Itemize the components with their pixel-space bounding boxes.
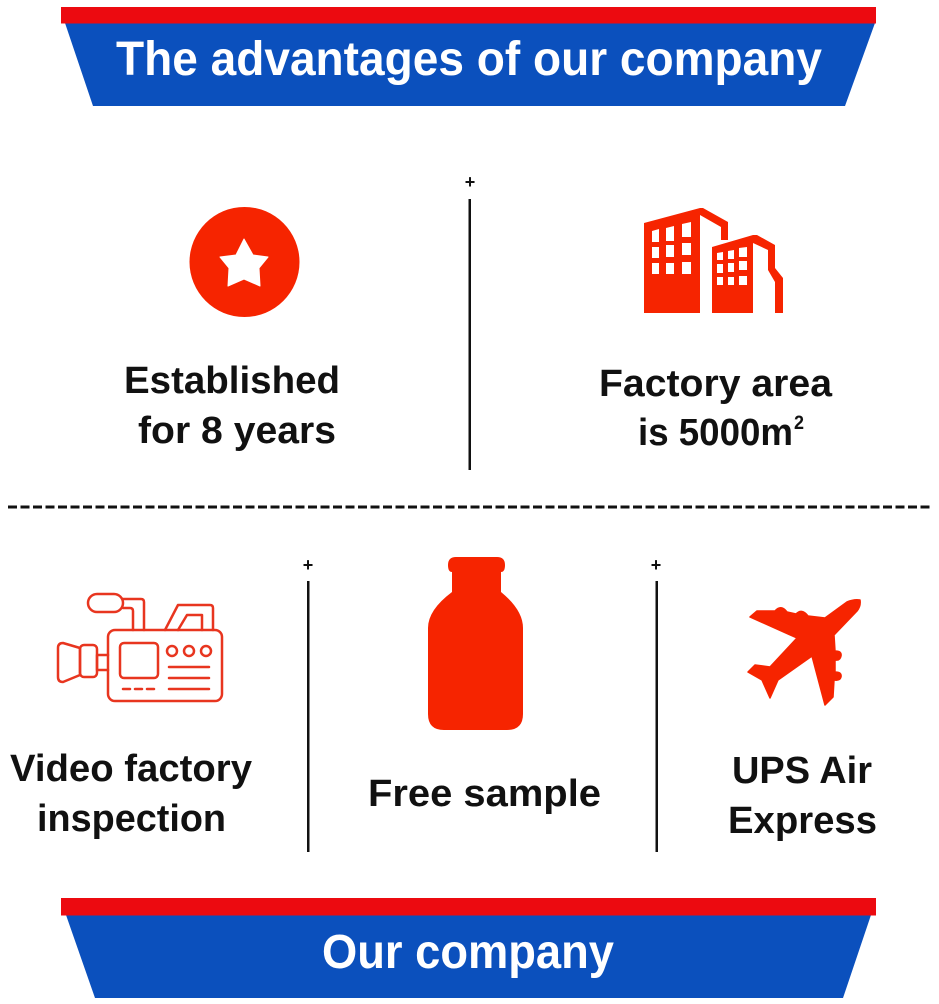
- label: factory area: 2: [794, 413, 804, 434]
- label: factory area: [599, 363, 833, 454]
- icon: video camera: [58, 594, 222, 701]
- bottom banner: [61, 898, 876, 998]
- dashed separator: [8, 506, 930, 508]
- panel: free sample: [368, 557, 601, 815]
- banner title: The advantages of our company: [116, 33, 822, 86]
- divider: left vertical with plus: +: [303, 555, 313, 575]
- label: ups air express: Express: [728, 800, 877, 842]
- label: ups air express: UPS Air: [732, 750, 872, 792]
- label: factory area: Factory area: [599, 363, 833, 405]
- label: established: for 8 years: [138, 410, 336, 452]
- label: video inspection: [10, 748, 252, 840]
- label: free sample: Free sample: [368, 773, 601, 815]
- divider: right vertical with plus: +: [651, 555, 661, 575]
- label: factory area: is 5000m: [638, 412, 793, 454]
- icon: bottle: [428, 557, 523, 730]
- icon: star badge: [190, 207, 300, 317]
- label: video inspection: Video factory: [10, 748, 252, 790]
- label: established: Established: [124, 360, 340, 402]
- top banner: [61, 7, 876, 106]
- label: established: [124, 360, 340, 452]
- icon: airplane: [748, 600, 860, 705]
- label: video inspection: inspection: [37, 798, 226, 840]
- panel: ups air express: [728, 600, 877, 842]
- banner caption: Our company: [322, 926, 614, 979]
- label: ups air express: [728, 750, 877, 842]
- panel: established: [124, 207, 340, 452]
- icon: factory buildings: [644, 208, 783, 313]
- panel: video inspection: [10, 594, 252, 840]
- panel: factory area: [599, 208, 833, 454]
- divider: top vertical with plus: +: [465, 172, 475, 192]
